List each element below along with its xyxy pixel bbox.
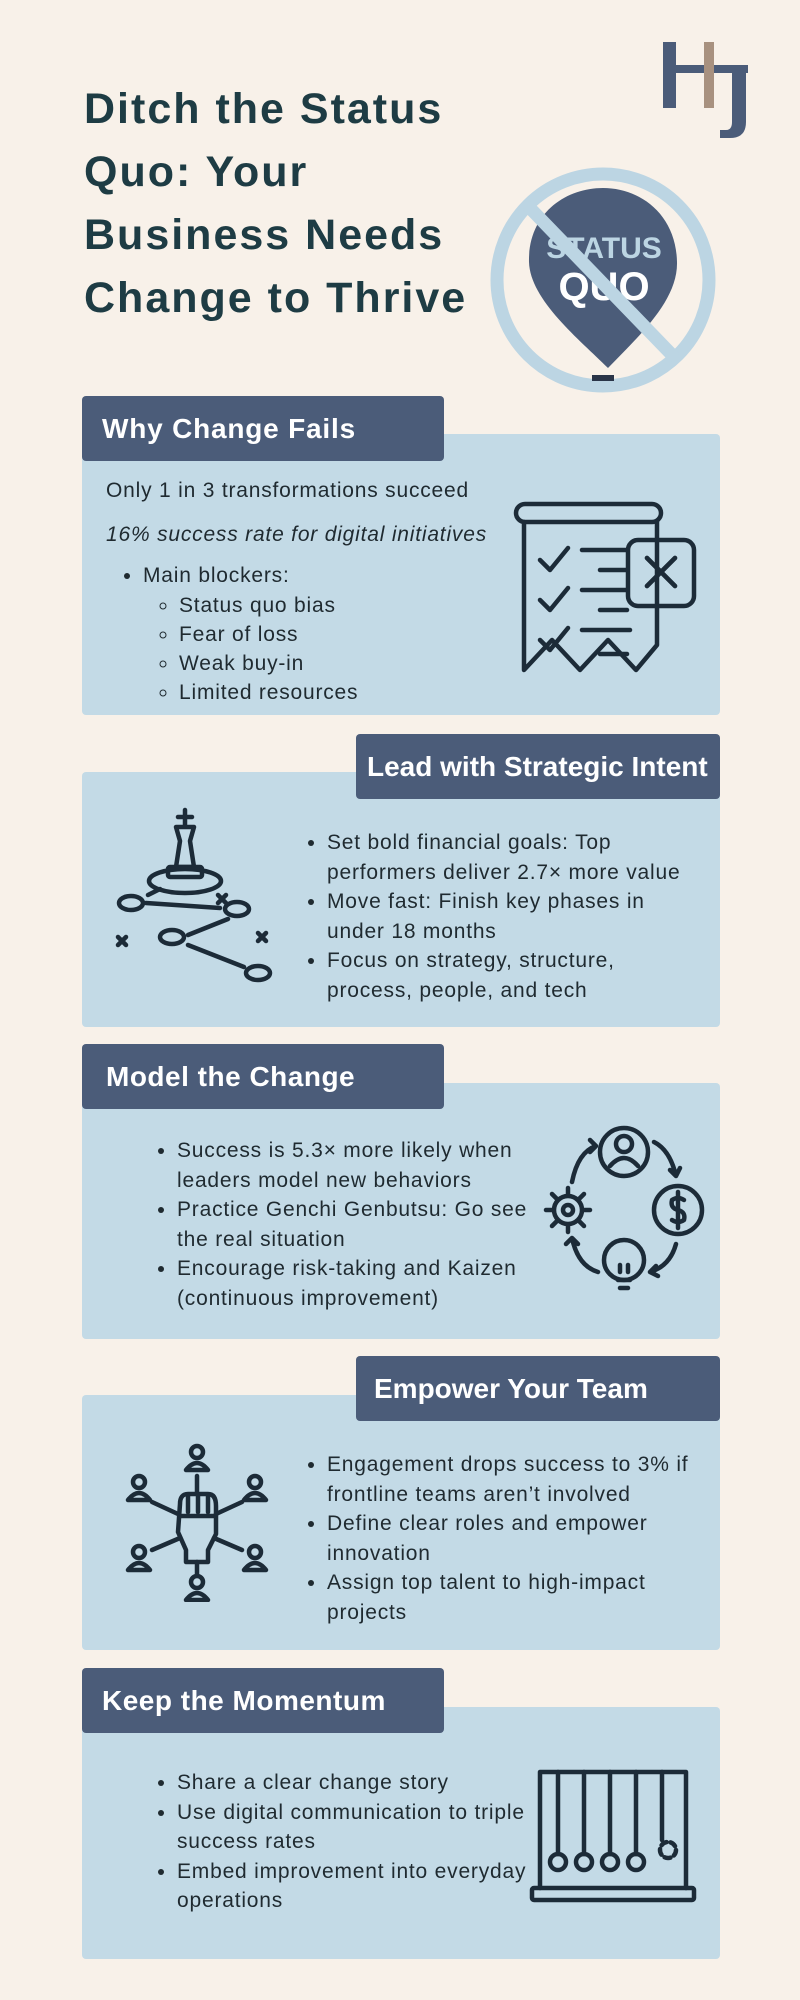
text: keep the momentum: Share a clear change story	[177, 1771, 449, 1794]
text: empower your team	[308, 1453, 688, 1624]
heading: model the change: Model the Change	[106, 1061, 355, 1092]
heading: keep the momentum: Keep the Momentum	[102, 1685, 386, 1716]
title: Ditch the Status	[84, 85, 443, 133]
text: empower your team: Assign top talent to high-impact projects	[327, 1571, 646, 1624]
title: Change to Thrive	[84, 274, 467, 322]
text: why change fails: 16% success rate for digital initiatives	[106, 522, 487, 546]
text: keep the momentum: Embed improvement into everyday operations	[177, 1860, 526, 1912]
heading: why change fails: Why Change Fails	[102, 413, 356, 444]
title	[84, 85, 467, 322]
panel: why change fails	[82, 434, 720, 715]
panel: model the change	[82, 1083, 720, 1339]
text: why change fails: Main blockers:	[143, 564, 290, 587]
text: strategic intent: Move fast: Finish key phases in under 18 months	[327, 890, 645, 942]
text: why change fails: Limited resources	[179, 680, 358, 704]
text: why change fails: Weak buy-in	[179, 652, 304, 674]
heading: empower your team	[356, 1356, 720, 1421]
text: why change fails	[106, 479, 487, 704]
icon: chess strategy	[116, 808, 272, 982]
icon: no status quo	[490, 168, 716, 392]
text: empower your team: Define clear roles and empower innovation	[327, 1512, 647, 1564]
panel: keep the momentum	[82, 1707, 720, 1959]
icon: newton's cradle	[530, 1770, 696, 1902]
heading: model the change	[82, 1044, 444, 1109]
panel: lead with strategic intent	[82, 772, 720, 1027]
text: model the change: Success is 5.3× more likely when leaders model new behaviors	[177, 1139, 512, 1192]
text: strategic intent: Set bold financial goals: Top performers deliver 2.7× more value	[327, 831, 680, 884]
text: model the change: Practice Genchi Genbutsu: Go see the real situation	[177, 1198, 527, 1250]
title: Quo: Your	[84, 148, 308, 196]
text: keep the momentum	[158, 1771, 526, 1912]
text: keep the momentum: Use digital communication to triple success rates	[177, 1800, 525, 1853]
heading: empower your team: Empower Your Team	[374, 1373, 648, 1404]
heading: lead with strategic intent: Lead with Strategic Intent	[367, 751, 708, 782]
title: Business Needs	[84, 211, 444, 259]
text: model the change: Encourage risk-taking and Kaizen (continuous improvement)	[177, 1257, 517, 1310]
panel: empower your team	[82, 1395, 720, 1650]
logo	[663, 42, 748, 138]
heading: keep the momentum	[82, 1668, 444, 1733]
text: why change fails: Fear of loss	[179, 622, 298, 646]
text: strategic intent	[308, 831, 680, 1002]
text: model the change	[158, 1139, 527, 1310]
text: empower your team: Engagement drops success to 3% if frontline teams aren’t involved	[327, 1453, 688, 1506]
icon: no status quo: STATUS	[546, 232, 662, 265]
icon: no status quo: QUO	[558, 265, 650, 309]
icon: cycle	[544, 1126, 704, 1290]
text: why change fails: Status quo bias	[179, 594, 336, 616]
heading: why change fails	[82, 396, 444, 461]
icon: team network	[126, 1444, 268, 1602]
text: why change fails: Only 1 in 3 transformations succeed	[106, 479, 469, 502]
heading: lead with strategic intent	[356, 734, 720, 799]
text: strategic intent: Focus on strategy, structure, process, people, and tech	[327, 949, 615, 1002]
icon: checklist with x	[514, 502, 696, 672]
